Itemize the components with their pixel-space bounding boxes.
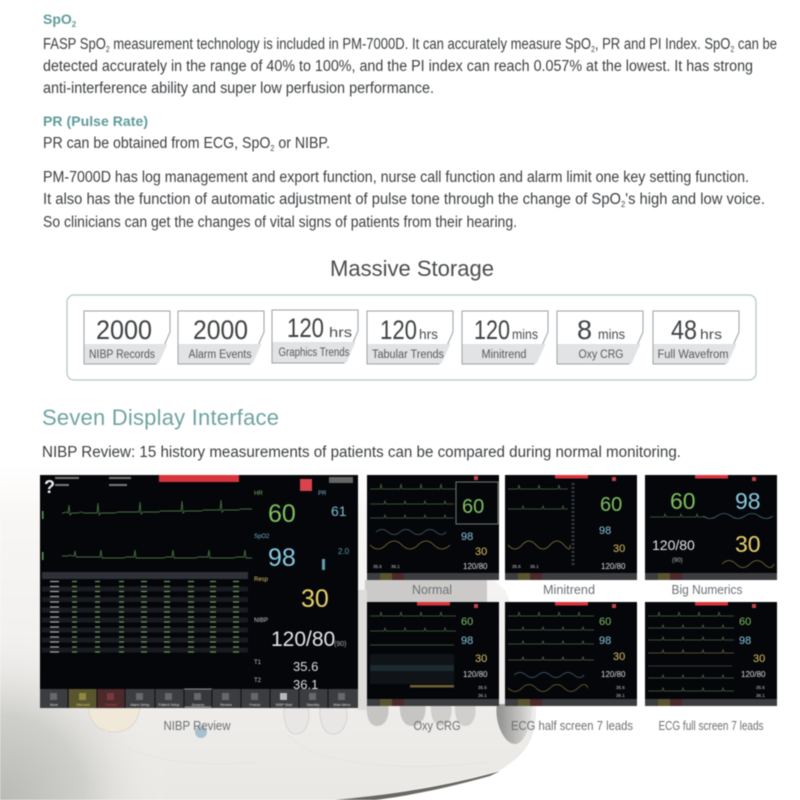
heading: Massive Storage: Massive Storage — [330, 256, 494, 281]
screen: NIBP Review: ? — [44, 477, 55, 497]
card: Alarm Events: Alarm Events — [188, 349, 252, 361]
card: Graphics Trends: Graphics Trends — [278, 347, 350, 359]
card: Full Wavefrom: Full Wavefrom — [658, 349, 728, 361]
card: Tabular Trends: Tabular Trends — [372, 349, 444, 361]
screen: Minitrend: 98 — [599, 525, 611, 537]
screen: ECG full screen 7 leads: 120/80 — [741, 670, 766, 679]
text block: SpO2 description: FASP SpO — [43, 36, 118, 53]
screen: Oxy CRG: 36.1 — [478, 693, 487, 698]
screen: ECG full screen 7 leads: 98 — [739, 635, 751, 647]
vital readings: 30 — [301, 585, 329, 613]
vital readings: 61 — [331, 503, 347, 519]
bottom menu: Patient Setup — [158, 703, 180, 707]
SpO2 section — [43, 11, 777, 97]
vital readings: 120/80 — [271, 628, 335, 651]
card: NIBP Records: 2000 — [96, 315, 152, 345]
heading: PR: PR (Pulse Rate) — [43, 113, 148, 129]
bottom menu: Standby — [307, 703, 320, 707]
heading: SpO2: 2 — [72, 20, 77, 29]
text block: functions: PM-7000D has log management and export function, nurse call function and alarm limit one key setting function. — [43, 169, 749, 186]
vital readings: T1 — [254, 660, 262, 666]
card: Oxy CRG — [557, 311, 643, 364]
bottom menu — [40, 689, 358, 708]
screen: NIBP Review — [40, 475, 358, 708]
text block: SpO2 description — [43, 36, 777, 97]
screen: ECG half screen 7 leads: 35.6 — [616, 685, 625, 690]
screen: Minitrend: 120/80 — [601, 562, 626, 571]
text block: PR description: or NIBP. — [274, 135, 330, 152]
PR section — [43, 113, 330, 153]
label: NIBP Review: NIBP Review — [164, 719, 231, 733]
bottom menu: Paused — [105, 703, 117, 707]
screen: ECG full screen 7 leads: 36.1 — [756, 693, 765, 698]
vital readings: T2 — [254, 678, 262, 684]
vital readings: HR — [254, 491, 263, 497]
card: Oxy CRG: 8 — [577, 315, 592, 345]
screen: ECG full screen 7 leads: 35.6 — [756, 685, 765, 690]
card: Minitrend: 120 — [474, 315, 510, 345]
card: NIBP Records — [84, 311, 170, 364]
text block: SpO2 description: 2 — [591, 45, 595, 54]
ECG waveforms — [62, 500, 252, 560]
card: Oxy CRG: mins — [598, 326, 625, 342]
screen: ECG full screen 7 leads — [645, 602, 777, 706]
screen: ECG half screen 7 leads — [505, 602, 637, 706]
panel: storage — [67, 295, 756, 380]
screen: Oxy CRG: 98 — [461, 635, 473, 647]
card: Minitrend — [462, 311, 548, 364]
label: Big Numerics: Big Numerics — [672, 583, 742, 597]
bottom menu: Screens — [192, 703, 205, 707]
screen: ECG half screen 7 leads: 36.1 — [616, 693, 625, 698]
screen: ECG full screen 7 leads: 60 — [739, 616, 751, 628]
vital readings: 36.1 — [293, 677, 318, 692]
screen: ECG half screen 7 leads: 60 — [599, 616, 611, 628]
screen: Normal: 60 — [462, 496, 484, 518]
card: Full Wavefrom — [653, 311, 739, 364]
card: Full Wavefrom: hrs — [700, 326, 722, 342]
screen: Minitrend: 60 — [600, 494, 622, 516]
card: Alarm Events — [178, 311, 264, 364]
card: Graphics Trends: 120 — [287, 313, 324, 343]
screen: Big Numerics: 120/80 — [652, 537, 695, 553]
card: Tabular Trends: 120 — [380, 315, 417, 345]
card: Graphics Trends: hrs — [329, 324, 352, 340]
text block: SpO2 description: measurement technology is included in PM-7000D. It can accurately measure SpO — [110, 36, 591, 53]
screen: Big Numerics — [645, 475, 777, 580]
text block: functions: 's high and low voice. — [625, 191, 765, 208]
screen: Minitrend: 35.6 — [512, 564, 521, 569]
vital readings: 35.6 — [293, 659, 318, 674]
screen: ECG half screen 7 leads: 98 — [599, 635, 611, 647]
screen: Normal — [367, 475, 499, 580]
vital readings: 2.0 — [338, 547, 350, 556]
bottom menu: Silenced — [76, 703, 90, 707]
text block: SpO2 description: can be — [734, 36, 777, 53]
card: Alarm Events: 2000 — [193, 315, 248, 345]
bottom menu: NIBP Start — [276, 703, 292, 707]
screen: Normal: 120/80 — [463, 562, 488, 571]
screen: Minitrend: 36.1 — [530, 564, 539, 569]
screen: Oxy CRG — [367, 602, 499, 706]
screen: ECG full screen 7 leads: 30 — [753, 653, 765, 665]
label: Normal: Normal — [412, 583, 452, 597]
card: Minitrend: mins — [512, 326, 538, 342]
vital readings: NIBP — [254, 618, 268, 624]
label: ECG half screen 7 leads: ECG half screen 7 leads — [511, 719, 633, 733]
screen: Minitrend — [505, 475, 637, 580]
screen: Normal: 30 — [475, 546, 487, 558]
screen: Big Numerics: (90) — [672, 558, 683, 564]
text block: SpO2 description: detected accurately in the range of 40% to 100%, and the PI index can reach 0.057% at the lowest. It has strong — [43, 58, 753, 75]
text block: SpO2 description: 2 — [730, 45, 735, 54]
card: Minitrend: Minitrend — [482, 349, 526, 361]
monitor device photo — [0, 465, 536, 800]
bottom menu: Freeze — [250, 703, 260, 707]
text block: functions: So clinicians can get the changes of vital signs of patients from their hearing. — [43, 214, 517, 231]
card: Tabular Trends — [367, 311, 453, 364]
text block: PR description: 2 — [270, 144, 275, 153]
vital readings — [254, 491, 350, 692]
card: Tabular Trends: hrs — [419, 326, 438, 342]
screen: Big Numerics: 98 — [735, 488, 761, 514]
heading: Seven Display Interface: Seven Display Interface — [42, 405, 279, 430]
vital readings: PR — [318, 491, 327, 497]
text block: SpO2 description: anti-interference ability and super low perfusion performance. — [43, 80, 434, 97]
screen: Minitrend: 30 — [613, 543, 625, 555]
screen: Normal: 98 — [461, 531, 473, 543]
screen: Oxy CRG: 35.6 — [478, 685, 487, 690]
screen: Big Numerics: 60 — [670, 488, 696, 514]
label: Oxy CRG: Oxy CRG — [414, 719, 460, 733]
screen: ECG half screen 7 leads: 30 — [613, 651, 625, 663]
bottom menu: Review — [220, 703, 232, 707]
text block: NIBP review description: NIBP Review: 15 history measurements of patients can be compared during normal monitoring. — [42, 444, 681, 461]
card: Graphics Trends — [272, 310, 358, 363]
card: Oxy CRG: Oxy CRG — [578, 349, 624, 361]
text block: functions: It also has the function of automatic adjustment of pulse tone through the change of SpO — [43, 191, 650, 208]
screen: Normal: 36.1 — [391, 564, 400, 569]
vital readings: 60 — [268, 500, 296, 528]
bottom menu: Main Menu — [333, 703, 351, 707]
text block: SpO2 description: , PR and PI Index. SpO — [595, 36, 730, 53]
text block: SpO2 description: 2 — [106, 45, 110, 54]
screen: ECG half screen 7 leads: 120/80 — [601, 670, 626, 679]
vital readings: Resp — [254, 577, 269, 583]
card: NIBP Records: NIBP Records — [89, 349, 155, 361]
label: ECG full screen 7 leads: ECG full screen 7 leads — [658, 719, 764, 733]
trend table — [42, 572, 248, 652]
vital readings: 98 — [268, 544, 296, 572]
vital readings: SpO2 — [254, 534, 270, 540]
text block: PR description: PR can be obtained from ECG, SpO — [43, 135, 292, 152]
vital readings: (90) — [334, 641, 346, 648]
screen: Big Numerics: 30 — [735, 531, 761, 557]
bottom menu: More — [50, 703, 58, 707]
screen: Oxy CRG: 120/80 — [463, 670, 488, 679]
bottom menu: Alarm Setup — [130, 703, 150, 707]
screen: Normal: 35.6 — [373, 564, 382, 569]
text block: functions: 2 — [621, 200, 626, 209]
heading: SpO2: SpO — [43, 11, 72, 27]
card: Full Wavefrom: 48 — [671, 315, 697, 345]
screen: Oxy CRG: 30 — [475, 653, 487, 665]
screen: Oxy CRG: 60 — [461, 616, 473, 628]
label: Minitrend: Minitrend — [543, 583, 595, 597]
text block: functions — [43, 169, 765, 231]
